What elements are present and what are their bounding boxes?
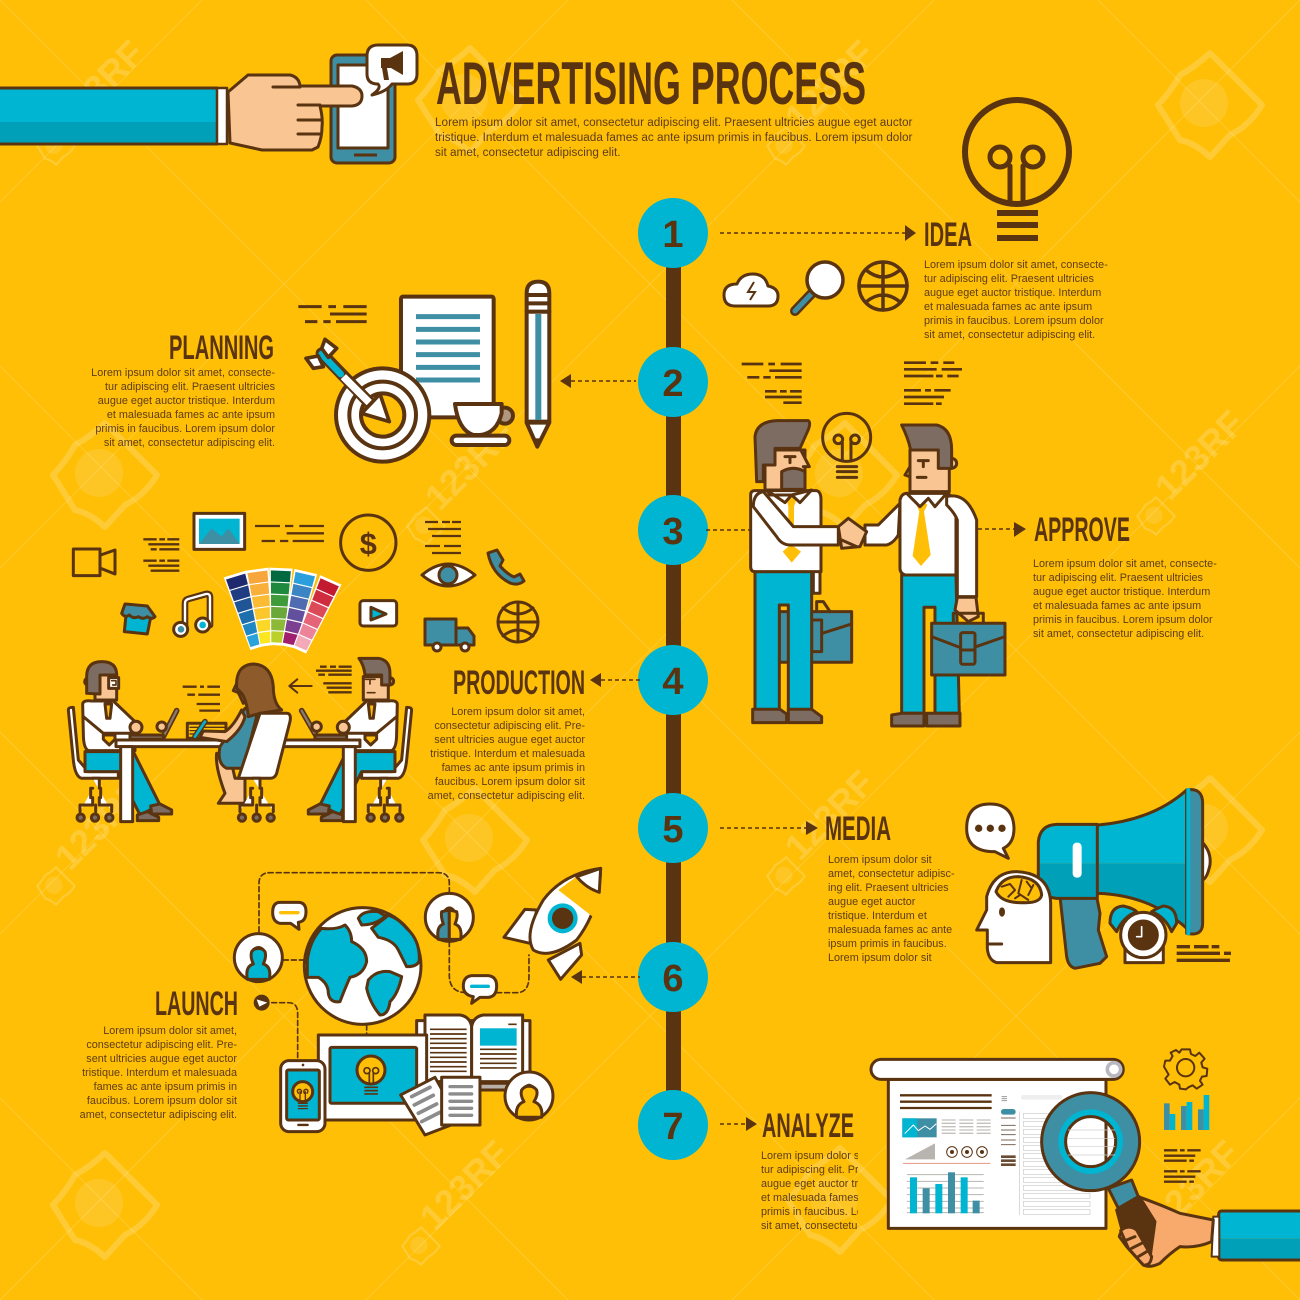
magnifier handle	[1108, 1180, 1138, 1208]
text: idea: augue eget auctor tristique. Interdum	[924, 287, 1101, 299]
text: launch: tristique. Interdum et malesuada	[82, 1067, 238, 1079]
step 1	[638, 198, 708, 268]
heading: analyze: ANALYZE	[762, 1107, 854, 1145]
icon: dollar coin: $	[360, 527, 377, 561]
text: media: augue eget auctor	[828, 896, 916, 908]
icon: eye	[422, 564, 475, 586]
arrow: step 3 to approve	[706, 522, 1026, 537]
speech bubble	[273, 902, 306, 929]
title: ADVERTISING PROCESS	[436, 50, 866, 117]
presentation board	[871, 1059, 1123, 1228]
text: media: malesuada fames ac ante	[828, 924, 952, 936]
text: planning: tur adipiscing elit. Praesent ultricies	[105, 381, 276, 393]
play marker	[254, 995, 270, 1011]
note dashes	[425, 522, 461, 553]
text: production: fames ac ante ipsum primis in	[442, 762, 585, 774]
person avatar top	[425, 893, 473, 941]
step 5: 5	[662, 809, 684, 851]
text: approve: tur adipiscing elit. Praesent ultricies	[1033, 572, 1204, 584]
arm sleeve	[0, 88, 227, 144]
icon: picture frame	[194, 513, 245, 549]
step 4: 4	[662, 661, 684, 703]
intro text: sit amet, consectetur adipiscing elit.	[435, 146, 620, 159]
text: idea: sit amet, consectetur adipiscing elit.	[924, 329, 1095, 341]
icon: large light bulb	[965, 100, 1069, 238]
section: approve	[742, 363, 1217, 726]
arrow: step 7 to analyze	[720, 1117, 757, 1131]
step 7	[638, 1090, 708, 1160]
icon: magnifier	[795, 262, 843, 311]
text: analyze: Lorem ipsum dolor sit amet, consecte-	[761, 1150, 945, 1162]
speech bubble	[463, 976, 497, 1003]
media illustration	[967, 790, 1231, 968]
section: launch	[80, 868, 601, 1135]
icon: cloud	[724, 274, 778, 306]
arrow: step 6 to launch	[571, 970, 640, 984]
icon: gear	[1164, 1049, 1207, 1089]
icon: video camera	[73, 549, 115, 576]
document	[401, 297, 494, 417]
text: launch: Lorem ipsum dolor sit amet,	[103, 1025, 237, 1037]
text: launch: faucibus. Lorem ipsum dolor sit	[87, 1095, 237, 1107]
arrow: step 5 to media	[720, 821, 818, 835]
woman at desk	[195, 664, 290, 821]
text: production: tristique. Interdum et malesuada	[430, 748, 586, 760]
step 5	[638, 793, 708, 863]
step 7: 7	[662, 1106, 684, 1148]
icon: music note	[174, 594, 210, 636]
icon: truck	[425, 619, 474, 651]
heading: approve: APPROVE	[1034, 511, 1130, 549]
step 3: 3	[662, 511, 684, 553]
right businessman	[865, 425, 1005, 726]
planning illustration	[298, 282, 549, 462]
text: idea: Lorem ipsum dolor sit amet, consecte-	[924, 259, 1108, 271]
text: production: sent ultricies augue eget auctor	[434, 734, 585, 746]
text: planning: Lorem ipsum dolor sit amet, consecte-	[91, 367, 275, 379]
arrow: step 2 to planning	[560, 374, 636, 388]
holding hand	[1119, 1197, 1213, 1266]
text: production: amet, consectetur adipiscing elit.	[428, 790, 585, 802]
alarm clock	[1110, 906, 1177, 963]
header: hand pressing phone	[0, 45, 417, 163]
fingers	[1121, 1227, 1152, 1265]
arrow	[289, 679, 312, 693]
text: production: consectetur adipiscing elit. Pre-	[434, 720, 585, 732]
text: media: amet, consectetur adipisc-	[828, 868, 955, 880]
text: launch: fames ac ante ipsum primis in	[94, 1081, 237, 1093]
analyze illustration	[871, 1049, 1300, 1266]
dashed connectors	[259, 873, 529, 1060]
text: approve: primis in faucibus. Lorem ipsum dolor	[1033, 614, 1213, 626]
dart arrow	[306, 339, 389, 422]
section: planning	[91, 282, 549, 462]
smartphone	[281, 1061, 325, 1132]
step 4	[638, 645, 708, 715]
arrow: step 4 to production	[590, 673, 640, 687]
text: planning: et malesuada fames ac ante ipsum	[107, 409, 275, 421]
step 6	[638, 942, 708, 1012]
papers	[401, 1077, 480, 1135]
person avatar right	[505, 1072, 553, 1120]
text: approve: et malesuada fames ac ante ipsum	[1033, 600, 1201, 612]
text: idea: tur adipiscing elit. Praesent ultricies	[924, 273, 1095, 285]
text: idea: et malesuada fames ac ante ipsum	[924, 301, 1092, 313]
tablet screen	[318, 1035, 427, 1120]
text: media: tristique. Interdum et	[828, 910, 927, 922]
hand sleeve	[1212, 1211, 1300, 1260]
text: idea: primis in faucibus. Lorem ipsum dolor	[924, 315, 1104, 327]
magnifying lens	[1042, 1093, 1140, 1191]
launch illustration	[234, 868, 601, 1135]
text: approve: sit amet, consectetur adipiscing elit.	[1033, 628, 1204, 640]
coffee cup	[452, 404, 513, 445]
pencil	[527, 282, 549, 447]
megaphone	[1038, 790, 1210, 968]
heading: media: MEDIA	[825, 810, 891, 848]
book	[417, 1015, 530, 1090]
production illustration	[68, 513, 412, 822]
text: launch: amet, consectetur adipiscing elit.	[80, 1109, 237, 1121]
text: launch: sent ultricies augue eget auctor	[86, 1053, 237, 1065]
hands	[130, 721, 349, 733]
text: media: ipsum primis in faucibus.	[828, 938, 947, 950]
icon: dollar coin	[341, 515, 396, 570]
globe	[304, 908, 421, 1024]
notebook	[187, 723, 226, 738]
step 1: 1	[662, 214, 684, 256]
icon: globe	[859, 262, 907, 310]
desk people	[68, 701, 172, 821]
text: launch: consectetur adipiscing elit. Pre-	[86, 1039, 237, 1051]
rocket	[504, 868, 601, 979]
text: analyze: et malesuada fames ac ante ipsum	[761, 1192, 929, 1204]
text: production: faucibus. Lorem ipsum dolor sit	[435, 776, 585, 788]
step 3	[638, 495, 708, 565]
icon: bar chart	[1164, 1095, 1209, 1130]
left head	[85, 662, 119, 700]
step 2: 2	[662, 363, 684, 405]
step 6: 6	[662, 958, 684, 1000]
text: approve: Lorem ipsum dolor sit amet, consecte-	[1033, 558, 1217, 570]
text: planning: primis in faucibus. Lorem ipsum dolor	[95, 423, 275, 435]
text: analyze: sit amet, consectetur adipiscing elit.	[761, 1220, 932, 1232]
speech bubble	[967, 804, 1014, 858]
text: media: ing elit. Praesent ultricies	[828, 882, 949, 894]
person avatar left	[234, 934, 282, 982]
icon: shop	[122, 604, 155, 634]
text: analyze: tur adipiscing elit. Praesent ultricies	[761, 1164, 932, 1176]
text: planning: sit amet, consectetur adipiscing elit.	[104, 437, 275, 449]
table	[116, 740, 360, 822]
section: media	[825, 790, 1231, 968]
text: analyze: primis in faucibus. Lorem ipsum dolor	[761, 1206, 941, 1218]
icon: play button	[360, 601, 397, 626]
handshake illustration	[742, 363, 1005, 726]
text: analyze: augue eget auctor tristique. Interdum	[761, 1178, 938, 1190]
intro text: tristique. Interdum et malesuada fames ac ante ipsum primis in faucibus. Lorem ipsum dolor	[435, 131, 912, 144]
note dashes	[742, 363, 962, 404]
text: production: Lorem ipsum dolor sit amet,	[451, 706, 585, 718]
small icons group	[422, 522, 538, 651]
section: production	[68, 513, 586, 822]
small bulb	[823, 413, 871, 477]
grip	[1117, 1197, 1155, 1253]
text: planning: augue eget auctor tristique. Interdum	[98, 395, 275, 407]
intro text: Lorem ipsum dolor sit amet, consectetur adipiscing elit. Praesent ultricies augue eget auctor	[435, 116, 913, 129]
icon: phone	[331, 55, 395, 163]
section: idea	[724, 100, 1108, 341]
note dashes	[1177, 947, 1231, 960]
arrows	[560, 225, 1026, 1131]
text: approve: augue eget auctor tristique. Interdum	[1033, 586, 1210, 598]
note dashes	[143, 526, 352, 711]
heading: production: PRODUCTION	[453, 664, 585, 702]
speech bubble with megaphone	[367, 45, 417, 95]
heading: idea: IDEA	[924, 216, 972, 254]
pointing hand	[228, 75, 362, 150]
note dashes	[298, 307, 367, 322]
text: media: Lorem ipsum dolor sit	[828, 854, 932, 866]
section: analyze	[761, 1049, 1300, 1266]
step 2	[638, 347, 708, 417]
head with brain	[977, 872, 1051, 963]
arrow: step 1 to idea	[720, 225, 916, 241]
text: media: Lorem ipsum dolor sit	[828, 952, 932, 964]
colour swatch fan	[224, 568, 341, 655]
heading: launch: LAUNCH	[155, 985, 238, 1023]
right head	[359, 658, 394, 700]
target	[336, 368, 429, 462]
heading: planning: PLANNING	[169, 329, 274, 367]
note dashes	[1164, 1150, 1201, 1182]
timeline spine	[666, 233, 681, 1125]
icon: phone receiver	[488, 550, 524, 584]
left businessman	[751, 421, 852, 723]
icon: globe	[498, 602, 538, 642]
laptops	[130, 711, 347, 739]
clasped hands	[838, 518, 867, 548]
